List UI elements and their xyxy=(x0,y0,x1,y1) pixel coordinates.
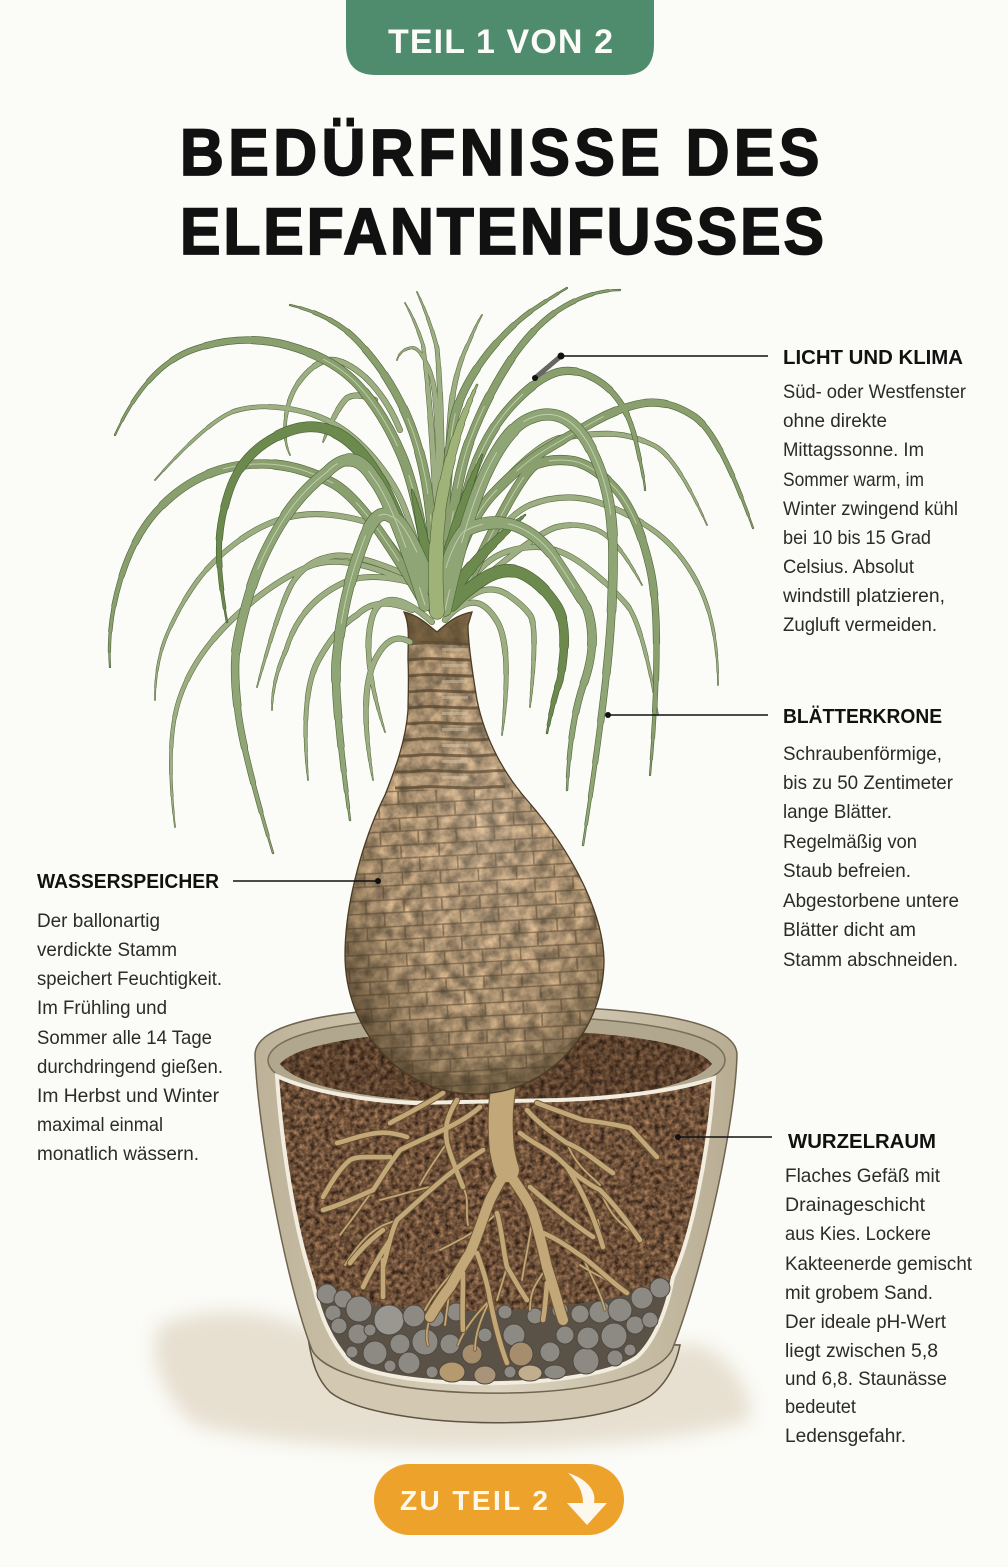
button: to part 2: ZU TEIL 2 xyxy=(400,1485,548,1516)
callout: Wasserspeicher: Sommer alle 14 Tage xyxy=(37,1027,212,1049)
callout: Blätterkrone: Schraubenförmige, xyxy=(783,743,942,765)
callout: Blätterkrone: Staub befreien. xyxy=(783,860,911,882)
trunk xyxy=(335,605,615,1100)
callout: Wurzelraum: aus Kies. Lockere xyxy=(785,1223,931,1245)
callout: Wurzelraum: WURZELRAUM xyxy=(788,1131,936,1153)
callout: Wasserspeicher: speichert Feuchtigkeit. xyxy=(37,968,222,990)
badge: part 1 of 2 xyxy=(346,0,654,75)
pot xyxy=(255,1006,737,1423)
callout: Licht und Klima: Mittagssonne. Im xyxy=(783,439,924,461)
callout: Blätterkrone: BLÄTTERKRONE xyxy=(783,705,942,728)
callout: Wurzelraum: mit grobem Sand. xyxy=(785,1282,933,1304)
button: to part 2 xyxy=(374,1464,624,1535)
callout: Blätterkrone: bis zu 50 Zentimeter xyxy=(783,772,953,794)
callout: Wurzelraum: Kakteenerde gemischt xyxy=(785,1253,973,1275)
callout: Blätterkrone: Abgestorbene untere xyxy=(783,890,959,912)
badge: part 1 of 2: TEIL 1 VON 2 xyxy=(388,23,613,61)
leader line: light xyxy=(532,352,768,381)
callout: Wasserspeicher: Im Herbst und Winter xyxy=(37,1085,219,1107)
title xyxy=(180,117,824,269)
leader line: water store xyxy=(233,878,381,884)
callout: Wasserspeicher: durchdringend gießen. xyxy=(37,1056,223,1078)
leader line: crown xyxy=(605,712,768,718)
callout: Wurzelraum: liegt zwischen 5,8 xyxy=(785,1340,938,1362)
title: BEDÜRFNISSE DES xyxy=(180,117,819,190)
callout: Wasserspeicher: verdickte Stamm xyxy=(37,939,177,961)
callout: Blätterkrone: Stamm abschneiden. xyxy=(783,949,958,971)
callout: Wasserspeicher: maximal einmal xyxy=(37,1114,163,1136)
callout: Wasserspeicher: WASSERSPEICHER xyxy=(37,871,220,893)
leaf crown xyxy=(109,288,753,853)
callout: Wasserspeicher: Der ballonartig xyxy=(37,910,160,932)
callout: Wurzelraum: Ledensgefahr. xyxy=(785,1425,906,1447)
callout: Wurzelraum: Flaches Gefäß mit xyxy=(785,1165,941,1187)
callout: Licht und Klima: Winter zwingend kühl xyxy=(783,498,958,520)
callout: Licht und Klima xyxy=(532,347,966,636)
callout: Blätterkrone xyxy=(605,705,959,971)
callout: Licht und Klima: Sommer warm, im xyxy=(783,469,924,491)
callout: Wurzelraum: Der ideale pH-Wert xyxy=(785,1311,947,1333)
callout: Blätterkrone: Regelmäßig von xyxy=(783,831,917,853)
illustration: potted ponytail palm xyxy=(109,288,753,1423)
callout: Wasserspeicher xyxy=(37,871,381,1165)
callout: Licht und Klima: bei 10 bis 15 Grad xyxy=(783,527,931,549)
leader line: root space xyxy=(675,1134,772,1140)
callout: Licht und Klima: windstill platzieren, xyxy=(782,585,945,607)
callout: Wurzelraum: und 6,8. Staunässe xyxy=(785,1368,947,1390)
icon: curved arrow xyxy=(567,1473,607,1525)
roots xyxy=(323,1090,657,1363)
callout: Licht und Klima: Celsius. Absolut xyxy=(783,556,915,578)
callout: Licht und Klima: ohne direkte xyxy=(783,410,887,432)
ground shadow xyxy=(154,1312,750,1449)
title: ELEFANTENFUSSES xyxy=(180,196,824,269)
callout: Licht und Klima: LICHT UND KLIMA xyxy=(783,347,963,369)
callout: Wasserspeicher: Im Frühling und xyxy=(37,997,167,1019)
callout: Licht und Klima: Zugluft vermeiden. xyxy=(783,614,937,636)
callout: Wurzelraum xyxy=(675,1131,973,1447)
soil surface xyxy=(280,1032,712,1101)
callout: Blätterkrone: Blätter dicht am xyxy=(783,919,916,941)
callout: Wurzelraum: Drainageschicht xyxy=(785,1194,926,1216)
callout: Wurzelraum: bedeutet xyxy=(785,1396,857,1418)
callout: Licht und Klima: Süd- oder Westfenster xyxy=(783,381,966,403)
callout: Blätterkrone: lange Blätter. xyxy=(783,801,892,823)
cutaway soil xyxy=(270,1070,720,1395)
drainage pebbles xyxy=(317,1278,670,1384)
callout: Wasserspeicher: monatlich wässern. xyxy=(37,1143,199,1165)
